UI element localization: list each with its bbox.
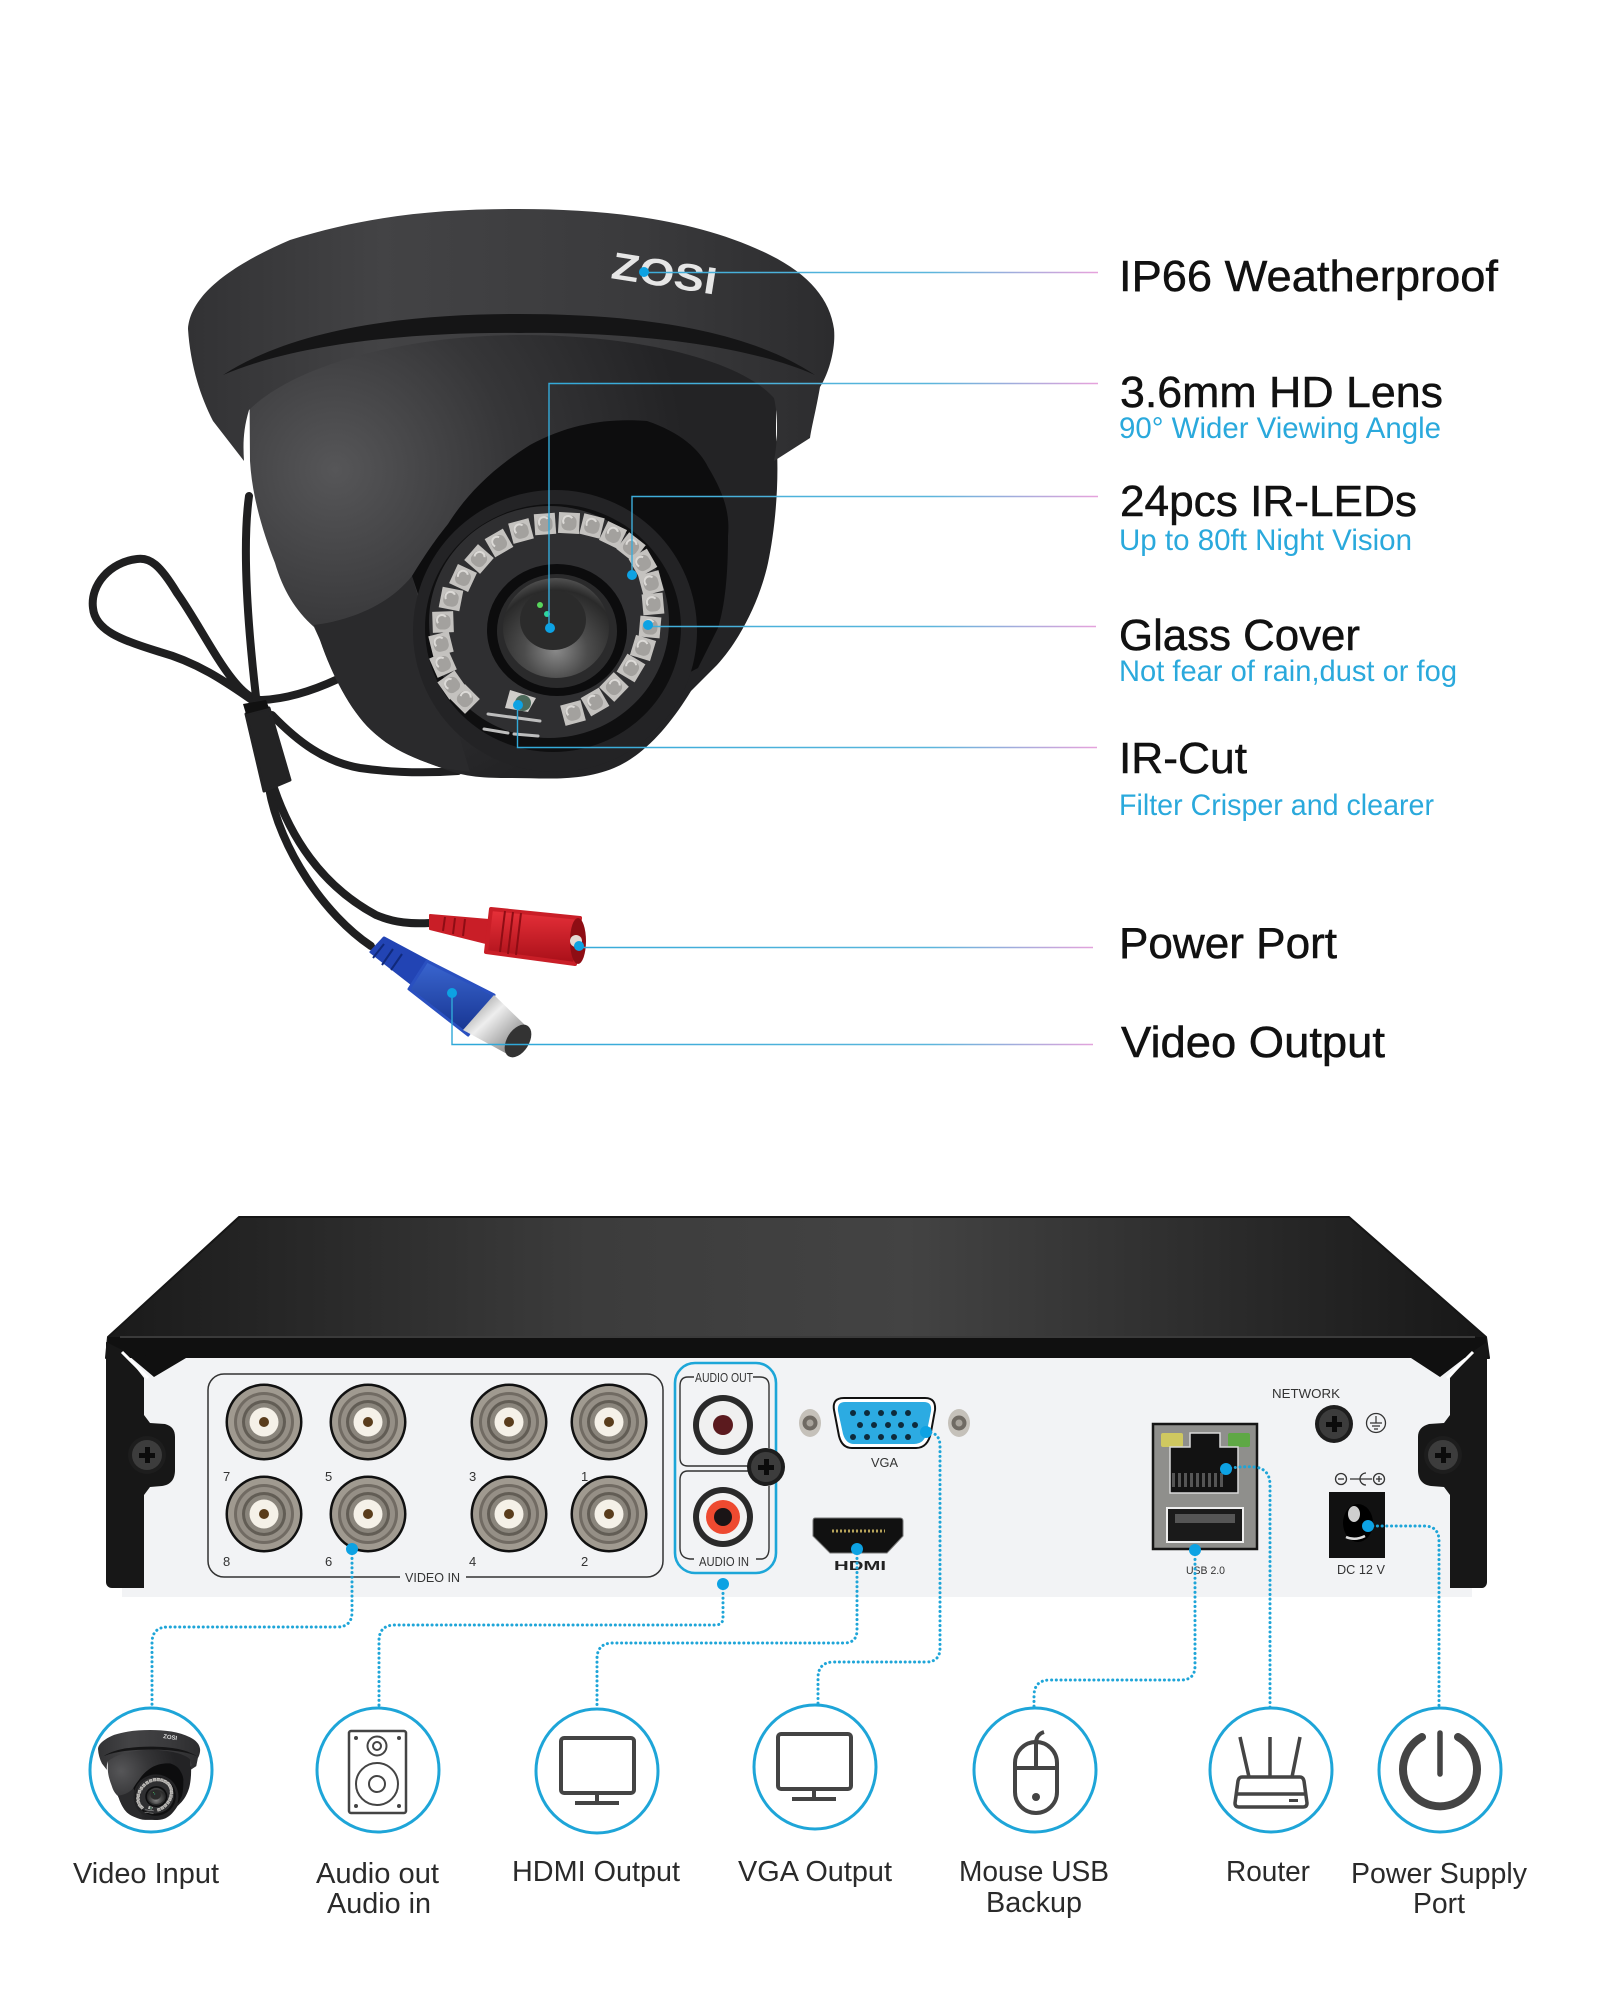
callout lines: camera <box>447 267 1098 1044</box>
icon: power <box>1379 1708 1501 1832</box>
logo: ZOSI: ZOSI <box>609 245 720 303</box>
dome camera <box>188 209 834 779</box>
label: VGA Output: VGA Output <box>738 1856 892 1888</box>
label: Mouse USB Backup: Mouse USB <box>959 1856 1109 1888</box>
blue video connector <box>371 938 537 1062</box>
label: Power Supply Port <box>1351 1858 1527 1920</box>
label: 3.6mm HD Lens: 3.6mm HD Lens <box>1120 368 1443 417</box>
label: Power Port: Power Port <box>1119 919 1337 968</box>
lens bezel <box>413 490 697 772</box>
dotted connectors <box>152 1426 1439 1710</box>
label: IP66 Weatherproof: IP66 Weatherproof <box>1119 252 1499 301</box>
cable junction sleeve <box>243 700 290 791</box>
video in group: 3 <box>469 1469 476 1484</box>
video in group: 8 <box>223 1554 230 1569</box>
camera body <box>249 320 777 779</box>
label: Glass Cover: Glass Cover <box>1119 611 1360 660</box>
sublabel: viewing angle: 90° Wider Viewing Angle <box>1119 412 1441 445</box>
icon: VGA monitor <box>754 1705 876 1829</box>
label: Audio out / Audio in: Audio in <box>327 1888 431 1920</box>
HDMI port <box>813 1518 903 1573</box>
icon: video input camera <box>90 1708 212 1832</box>
label: IR-Cut: IR-Cut <box>1119 734 1247 783</box>
label: HDMI Output: HDMI Output <box>512 1856 680 1888</box>
label: Audio out / Audio in: Audio out <box>316 1858 439 1890</box>
red power connector <box>430 909 586 964</box>
label: Audio out / Audio in <box>316 1858 439 1920</box>
video in group: 6 <box>325 1554 332 1569</box>
icon: HDMI monitor <box>536 1709 658 1833</box>
label: Mouse USB Backup: Backup <box>986 1887 1082 1919</box>
DVR top cover <box>106 1217 1489 1358</box>
VGA port <box>799 1398 970 1470</box>
sublabel: night vision: Up to 80ft Night Vision <box>1119 524 1412 557</box>
icon: video input camera: ZOSI <box>163 1734 178 1742</box>
video in group: 1 <box>581 1469 588 1484</box>
dome rim <box>188 209 834 461</box>
camera cable <box>93 496 458 946</box>
network label and ground <box>1272 1386 1386 1443</box>
audio group: AUDIO IN <box>699 1554 749 1569</box>
IR LED ring <box>428 512 664 726</box>
video in group: 5 <box>325 1469 332 1484</box>
audio group <box>675 1363 785 1573</box>
label: Mouse USB Backup <box>959 1856 1109 1919</box>
network and USB port: USB 2.0 <box>1186 1565 1225 1577</box>
VGA port: VGA <box>871 1455 898 1470</box>
HDMI port: HDMI <box>834 1558 886 1573</box>
DVR front lip <box>108 1337 1486 1358</box>
video in group <box>208 1374 663 1585</box>
video in group: VIDEO IN <box>405 1570 460 1585</box>
icon: router <box>1210 1708 1332 1832</box>
right flange <box>1418 1342 1487 1588</box>
audio group: AUDIO OUT <box>695 1370 753 1385</box>
hood cavity <box>412 420 728 691</box>
DC power jack: DC 12 V <box>1337 1562 1385 1577</box>
network label and ground: NETWORK <box>1272 1386 1340 1401</box>
DC power jack <box>1329 1473 1385 1577</box>
label: Video Output: Video Output <box>1121 1018 1385 1067</box>
icon: speaker <box>317 1708 439 1832</box>
sublabel: filter: Filter Crisper and clearer <box>1119 789 1434 822</box>
label: Power Supply Port: Port <box>1413 1888 1465 1920</box>
DVR recorder <box>106 1217 1489 1597</box>
sublabel: weather: Not fear of rain,dust or fog <box>1119 655 1457 688</box>
video in group: 7 <box>223 1469 230 1484</box>
label: Video Input: Video Input <box>73 1858 219 1890</box>
icon: mouse <box>974 1708 1096 1832</box>
label: 24pcs IR-LEDs: 24pcs IR-LEDs <box>1120 477 1417 526</box>
label: Router: Router <box>1226 1856 1310 1888</box>
network and USB port <box>1153 1424 1257 1577</box>
IR-cut sensor <box>505 690 536 712</box>
left flange <box>106 1342 175 1588</box>
video in group: 2 <box>581 1554 588 1569</box>
lower shoulder <box>314 576 470 772</box>
lens <box>487 564 627 696</box>
label: Power Supply Port: Power Supply <box>1351 1858 1527 1890</box>
DVR rear panel <box>122 1358 1472 1597</box>
video in group: 4 <box>469 1554 476 1569</box>
